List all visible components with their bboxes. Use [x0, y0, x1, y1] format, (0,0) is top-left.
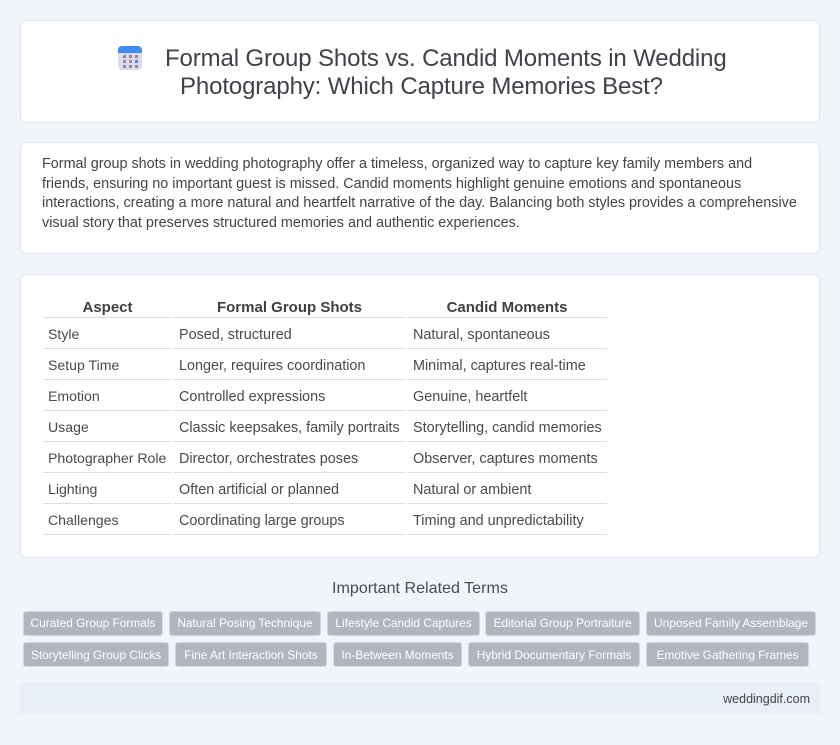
related term tags: Curated Group Formals [31, 616, 155, 630]
related term tags: Unposed Family Assemblage [654, 616, 808, 630]
row: lighting: Natural or ambient [413, 482, 531, 498]
title [165, 45, 727, 100]
related term tags: Storytelling Group Clicks [31, 648, 161, 662]
row: emotion: Controlled expressions [179, 389, 325, 405]
table header row: Formal Group Shots [217, 299, 362, 316]
row: emotion: Emotion [48, 388, 100, 404]
row: lighting [43, 481, 607, 504]
row: usage: Classic keepsakes, family portraits [179, 420, 400, 436]
related term tags [23, 611, 816, 667]
row: setup time [43, 357, 607, 380]
text block: introduction [42, 156, 797, 230]
heading: related terms: Important Related Terms [332, 579, 508, 597]
row: lighting: Lighting [48, 481, 97, 497]
comparison table [43, 299, 607, 535]
row: setup time: Setup Time [48, 357, 119, 373]
footer bar [20, 682, 820, 714]
row: emotion: Genuine, heartfelt [413, 389, 527, 405]
row: setup time: Minimal, captures real-time [413, 358, 586, 374]
related term tags: Hybrid Documentary Formals [477, 648, 631, 662]
row: photographer role: Director, orchestrates poses [179, 451, 358, 467]
table header row [43, 299, 607, 318]
row: usage: Usage [48, 419, 89, 435]
row: usage [43, 419, 607, 442]
icon: calendar [118, 46, 142, 70]
panel: introduction [20, 142, 820, 254]
related term tags: Emotive Gathering Frames [656, 648, 799, 662]
row: photographer role [43, 450, 607, 473]
text block: introduction: friends, ensuring no important guest is missed. Candid moments highlight genuine emotions and spontaneous [42, 176, 741, 192]
title: Photography: Which Capture Memories Best? [180, 73, 663, 100]
row: challenges: Timing and unpredictability [413, 513, 584, 529]
row: usage: Storytelling, candid memories [413, 420, 602, 436]
related term tags: Lifestyle Candid Captures [335, 616, 472, 630]
footer site name: weddingdif.com [723, 692, 810, 706]
table header row: Candid Moments [447, 299, 567, 316]
related term tags: Natural Posing Technique [177, 616, 313, 630]
text block: introduction: Formal group shots in wedding photography offer a timeless, organized way to capture key family members and [42, 156, 752, 172]
row: emotion [43, 388, 607, 411]
panel: comparison table [20, 274, 820, 558]
row: lighting: Often artificial or planned [179, 482, 339, 498]
table header row: Aspect [82, 299, 133, 316]
text block: introduction: visual story that preserves structured memories and authentic experiences. [42, 214, 520, 230]
text block: introduction: interactions, creating a more natural and heartfelt narrative of the day. Balancing both styles provides a comprehensive [42, 195, 797, 211]
row: photographer role: Observer, captures moments [413, 451, 598, 467]
related term tags: Fine Art Interaction Shots [184, 648, 318, 662]
panel: title header [20, 20, 820, 123]
related term tags: In-Between Moments [341, 648, 454, 662]
row: challenges: Coordinating large groups [179, 513, 345, 529]
related term tags: Editorial Group Portraiture [493, 616, 632, 630]
row: challenges [43, 512, 607, 535]
row: style: Posed, structured [179, 327, 292, 343]
row: style: Style [48, 326, 79, 342]
row: style [43, 326, 607, 349]
row: photographer role: Photographer Role [48, 450, 166, 466]
row: style: Natural, spontaneous [413, 327, 550, 343]
row: challenges: Challenges [48, 512, 119, 528]
row: setup time: Longer, requires coordination [179, 358, 365, 374]
title: Formal Group Shots vs. Candid Moments in Wedding [165, 45, 727, 72]
